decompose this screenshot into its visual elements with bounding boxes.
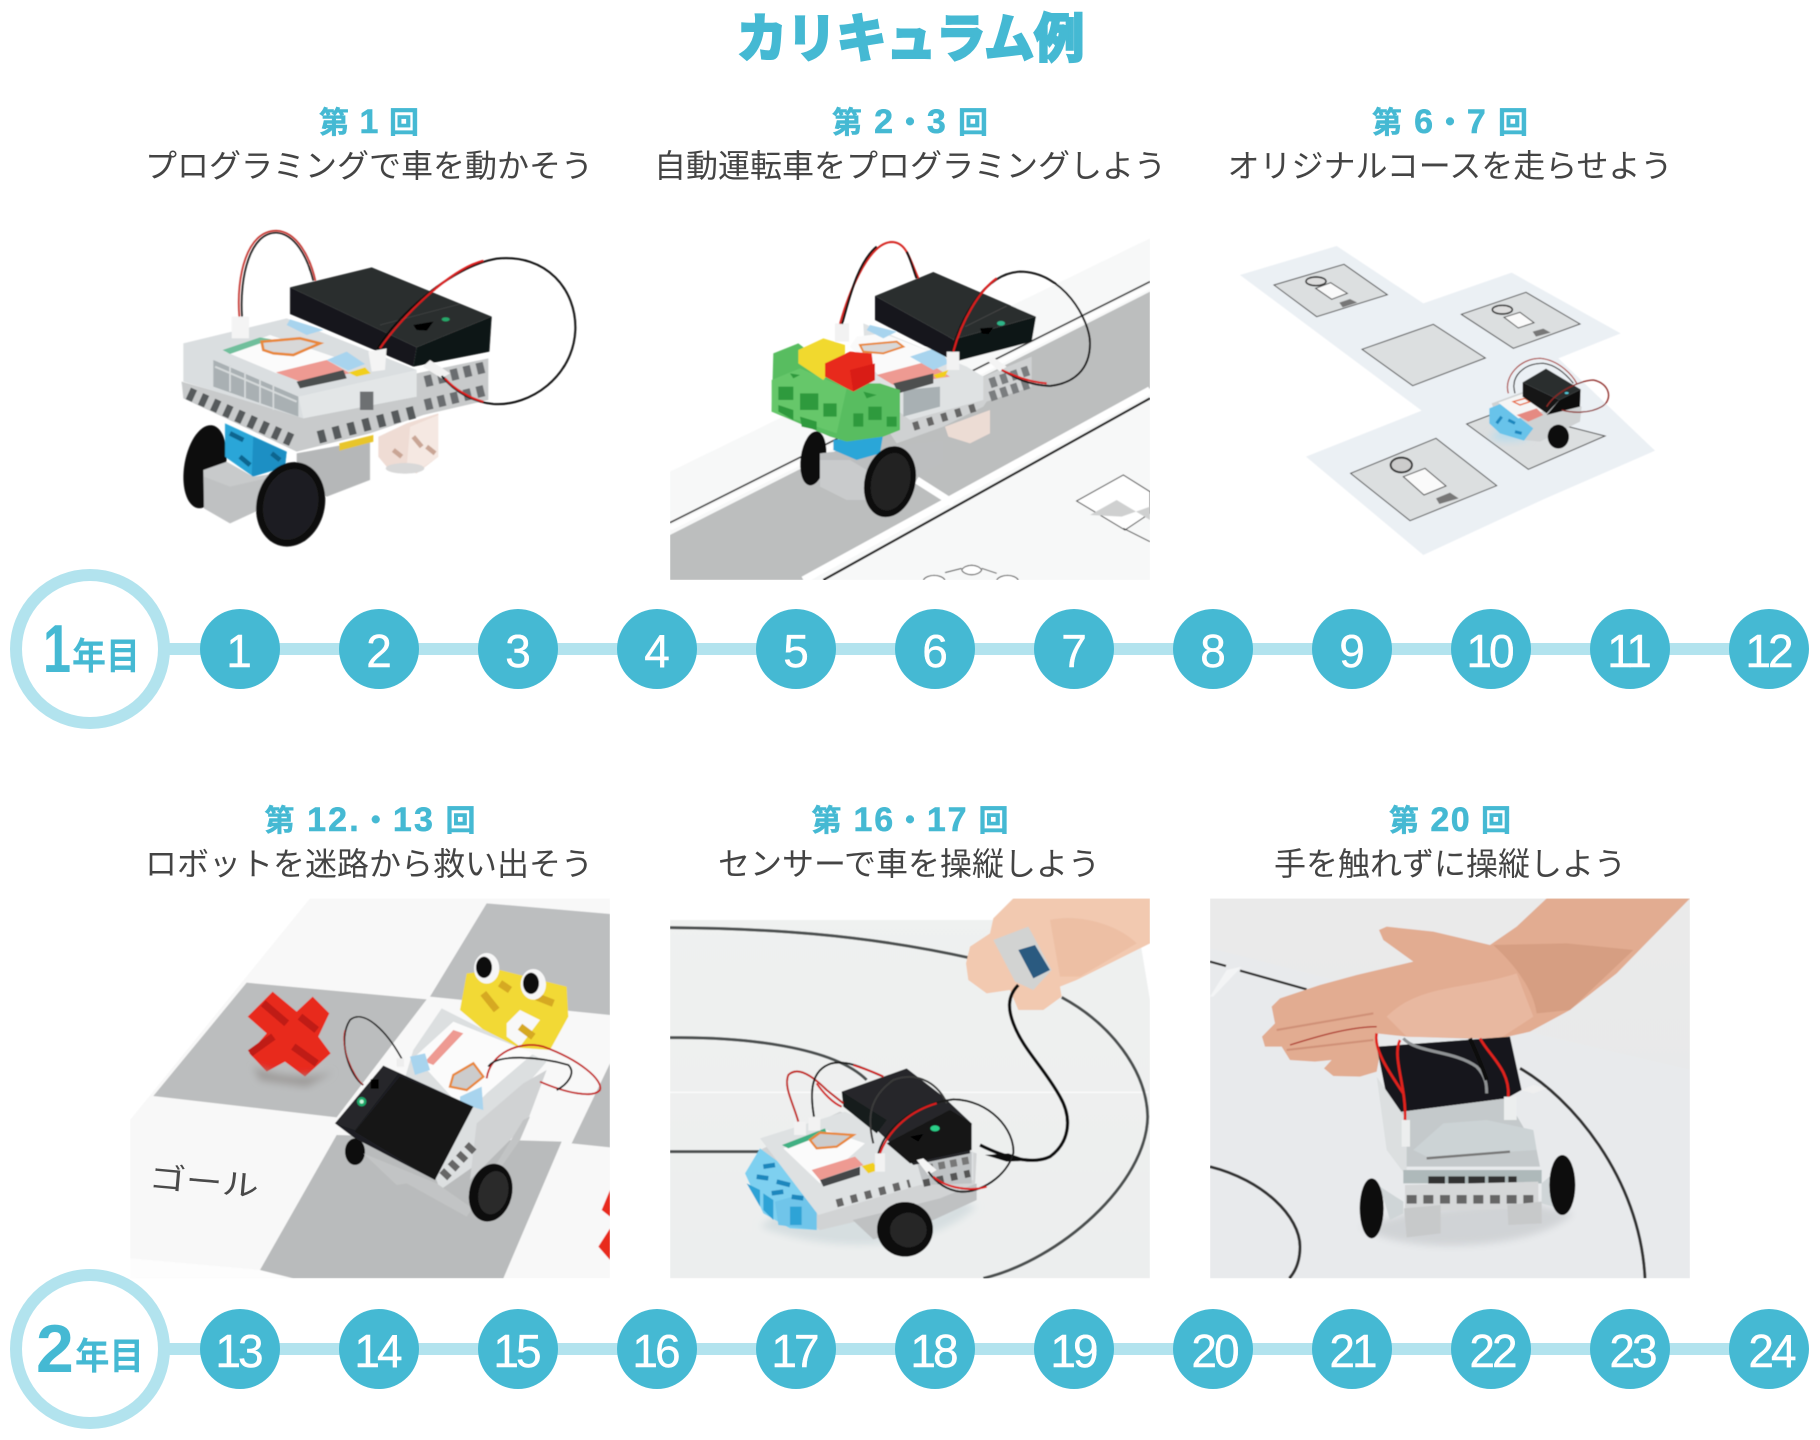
step 3	[478, 609, 558, 689]
step 6	[895, 609, 975, 689]
step 7: 7	[1061, 625, 1087, 677]
step 21	[1312, 1309, 1392, 1389]
step 4: 4	[644, 625, 670, 677]
heading: session 2-3: 第 2・3 回	[832, 103, 988, 141]
photo: robot on checkered maze sheet: ゴール	[148, 1161, 260, 1204]
heading: session 6-7: 第 6・7 回	[1372, 103, 1528, 141]
year badge: 1年目: 年目	[72, 636, 140, 677]
photo: original course sheets	[1240, 246, 1655, 555]
step 19	[1034, 1309, 1114, 1389]
heading: session 1	[145, 103, 593, 184]
step 17	[756, 1309, 836, 1389]
timeline: year 2	[16, 1275, 1809, 1423]
heading: session 16-17: センサーで車を操縦しよう	[718, 846, 1100, 882]
step 7	[1034, 609, 1114, 689]
step 17: 17	[771, 1325, 818, 1377]
step 16: 16	[632, 1325, 679, 1377]
step 20: 20	[1191, 1325, 1238, 1377]
photo: robot car with battery box	[177, 231, 575, 554]
step 21: 21	[1329, 1325, 1376, 1377]
timeline line	[160, 643, 1770, 655]
step 10	[1451, 609, 1531, 689]
step 24	[1729, 1309, 1809, 1389]
step 16	[617, 1309, 697, 1389]
heading: session 1: 第 1 回	[319, 103, 419, 141]
step 14	[339, 1309, 419, 1389]
step 4	[617, 609, 697, 689]
heading: session 6-7: オリジナルコースを走らせよう	[1227, 148, 1673, 184]
step 10: 10	[1466, 625, 1513, 677]
timeline: year 1	[16, 575, 1809, 723]
heading: session 12-13: ロボットを迷路から救い出そう	[145, 846, 593, 882]
step 3: 3	[505, 625, 531, 677]
heading: session 2-3	[654, 103, 1166, 184]
step 8	[1173, 609, 1253, 689]
step 12: 12	[1745, 625, 1792, 677]
year badge: 1年目: 1	[43, 611, 71, 687]
year badge: 1年目	[16, 575, 164, 723]
heading: session 2-3: 自動運転車をプログラミングしよう	[654, 148, 1166, 184]
heading: session 12-13: 第 12.・13 回	[264, 801, 476, 839]
heading: session 20	[1274, 801, 1626, 882]
step 8: 8	[1200, 625, 1226, 677]
step 6: 6	[922, 625, 948, 677]
step 20	[1173, 1309, 1253, 1389]
year badge: 2年目	[16, 1275, 164, 1423]
heading: session 6-7	[1227, 103, 1673, 184]
step 1	[200, 609, 280, 689]
photo: robot on checkered maze sheet	[130, 898, 610, 1278]
step 23: 23	[1609, 1325, 1656, 1377]
step 5: 5	[783, 625, 809, 677]
title: カリキュラム例	[737, 11, 1084, 69]
step 13	[200, 1309, 280, 1389]
step 23	[1590, 1309, 1670, 1389]
step 11: 11	[1607, 625, 1650, 677]
photo: hand over robot gesture control	[1210, 898, 1690, 1278]
step 12	[1729, 609, 1809, 689]
heading: session 16-17: 第 16・17 回	[812, 801, 1008, 839]
step 22	[1451, 1309, 1531, 1389]
step 13: 13	[215, 1325, 262, 1377]
step 9: 9	[1339, 625, 1365, 677]
heading: session 1: プログラミングで車を動かそう	[145, 148, 593, 184]
photo: robot controlled with hand sensor on course	[670, 898, 1150, 1278]
step 1: 1	[226, 625, 252, 677]
heading: session 20: 第 20 回	[1389, 801, 1511, 839]
heading: session 12-13	[145, 801, 593, 882]
step 22: 22	[1469, 1325, 1516, 1377]
step 9	[1312, 609, 1392, 689]
heading: session 20: 手を触れずに操縦しよう	[1274, 846, 1626, 882]
step 15: 15	[493, 1325, 540, 1377]
step 18	[895, 1309, 975, 1389]
step 15	[478, 1309, 558, 1389]
step 19: 19	[1050, 1325, 1097, 1377]
step 2	[339, 609, 419, 689]
step 18: 18	[910, 1325, 957, 1377]
photo: robot car with line-tracing sensor on road sheet	[670, 238, 1150, 580]
year badge: 2年目: 年目	[75, 1336, 144, 1377]
step 2: 2	[366, 625, 392, 677]
step 24: 24	[1748, 1325, 1796, 1377]
step 5	[756, 609, 836, 689]
year badge: 2年目: 2	[36, 1311, 74, 1387]
timeline line	[160, 1343, 1770, 1355]
step 14: 14	[354, 1325, 402, 1377]
step 11	[1590, 609, 1670, 689]
heading: session 16-17	[718, 801, 1100, 882]
